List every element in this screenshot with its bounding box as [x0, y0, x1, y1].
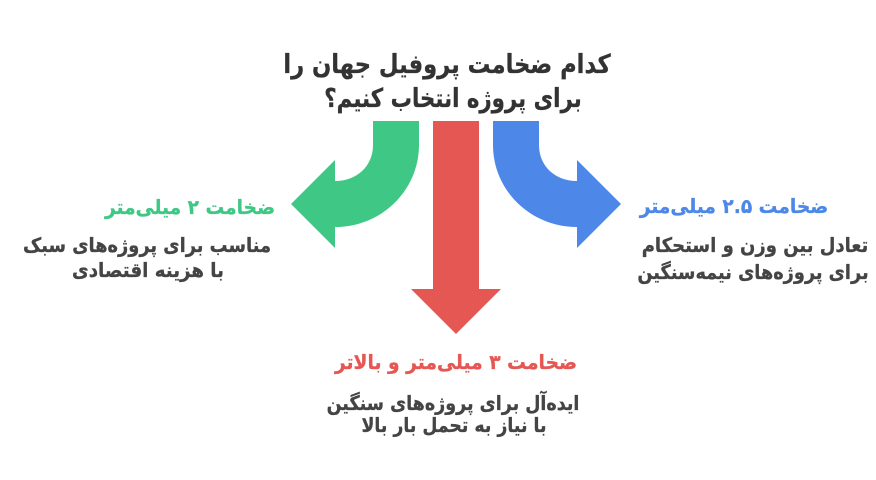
description: 2 mm: مناسب برای پروژه‌های سبک: [23, 233, 271, 257]
description: 2 mm: با هزینه اقتصادی: [72, 258, 223, 282]
title: کدام ضخامت پروفیل جهان را: [283, 50, 611, 80]
arrow: green left: [291, 121, 419, 248]
heading: 3 mm and above: ضخامت ۳ میلی‌متر و بالاتر: [335, 350, 577, 374]
description: 2.5 mm: برای پروژه‌های نیمه‌سنگین: [637, 260, 869, 284]
description: 3 mm and above: ایده‌آل برای پروژه‌های سنگین: [326, 391, 579, 415]
right option: 2.5 mm: [637, 194, 869, 284]
description: 3 mm and above: با نیاز به تحمل بار بالا: [362, 413, 546, 437]
heading: 2.5 mm: ضخامت ۲.۵ میلی‌متر: [639, 194, 828, 218]
description: 2.5 mm: تعادل بین وزن و استحکام: [642, 233, 868, 257]
arrow: red down: [411, 121, 501, 334]
arrow: blue right: [493, 121, 621, 248]
left option: 2 mm: [23, 195, 275, 282]
title: [283, 50, 611, 114]
heading: 2 mm: ضخامت ۲ میلی‌متر: [105, 195, 275, 219]
description: 2 mm: [23, 233, 271, 282]
description: 2.5 mm: [637, 233, 869, 284]
description: 3 mm and above: [326, 390, 579, 438]
bottom option: 3 mm and above: [326, 350, 579, 438]
title: برای پروژه انتخاب کنیم؟: [324, 84, 582, 114]
